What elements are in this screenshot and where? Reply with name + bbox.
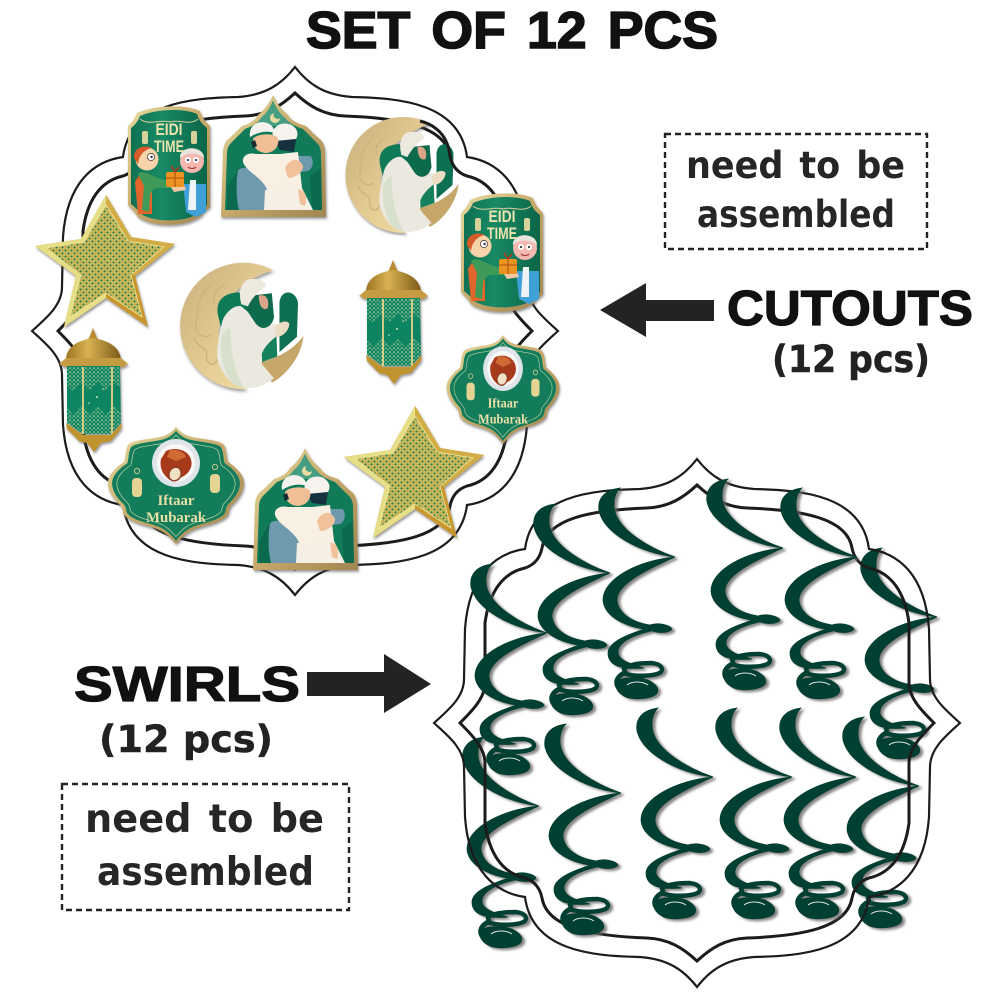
label: cutouts: (12 pcs): [772, 338, 930, 381]
panel: cutouts: [35, 95, 559, 570]
cutout: Eidi Time card left: [128, 106, 210, 225]
cutouts backdrop frame: [32, 67, 558, 595]
cutout: lantern left: [59, 328, 128, 452]
cutout: Iftaar Mubarak card right: Mubarak: [478, 411, 528, 427]
label: swirls: (12 pcs): [99, 718, 273, 761]
swirl 9: [780, 708, 856, 919]
swirl 2: [534, 504, 610, 715]
callout: cutouts assembly note: assembled: [697, 193, 895, 236]
swirl 7: [637, 708, 713, 919]
cutout: Eidi Time card right: [461, 193, 543, 312]
swirl 8: [716, 708, 792, 919]
arrow: to cutouts: [600, 283, 714, 337]
label: cutouts: CUTOUTS: [727, 282, 973, 336]
cutout: Eidi Time card right: EIDI: [488, 207, 516, 226]
swirl 1: [471, 564, 547, 775]
swirl far left lower: [463, 737, 539, 948]
arrow: to swirls: [307, 654, 431, 713]
callout: swirls assembly note: [62, 784, 349, 910]
cutout: lantern right: [359, 260, 428, 384]
label: swirls: [74, 658, 300, 761]
swirl 4: [707, 479, 783, 690]
callout: swirls assembly note: assembled: [97, 850, 314, 895]
cutout: Eidi Time card left: TIME: [154, 137, 184, 156]
cutout: star right: [344, 406, 484, 538]
cutout: star left: [35, 195, 175, 327]
callout: cutouts assembly note: [665, 134, 927, 249]
callout: cutouts assembly note: need to be: [686, 144, 905, 187]
label: swirls: SWIRLS: [74, 658, 300, 712]
swirls behind frame: [463, 548, 937, 948]
cutout: Iftaar Mubarak card right: Iftaar: [488, 395, 518, 411]
cutout: Iftaar Mubarak card left: Mubarak: [146, 510, 207, 526]
swirl 3: [599, 488, 675, 699]
swirl far right lower: [843, 717, 919, 928]
cutout: Iftaar Mubarak card right: [447, 335, 559, 444]
cutout: hug card bottom: [253, 448, 358, 570]
cutout: Iftaar Mubarak card left: Iftaar: [158, 493, 195, 509]
cutout: hug card top: [221, 95, 326, 217]
cutout: Iftaar Mubarak card left: [108, 427, 244, 544]
cutout: crescent small: [345, 117, 458, 233]
title: SET OF 12 PCS: [306, 2, 718, 60]
swirl 6: [545, 724, 621, 935]
cutout: crescent large: [180, 263, 303, 389]
cutout: Eidi Time card right: TIME: [487, 224, 517, 243]
swirl far right upper: [861, 548, 937, 759]
panel: swirls: [471, 479, 857, 935]
swirls backdrop frame: [434, 459, 960, 987]
cutout: Eidi Time card left: EIDI: [156, 120, 182, 139]
label: cutouts: [727, 282, 973, 381]
swirl 5: [781, 488, 857, 699]
callout: swirls assembly note: need to be: [85, 797, 324, 842]
